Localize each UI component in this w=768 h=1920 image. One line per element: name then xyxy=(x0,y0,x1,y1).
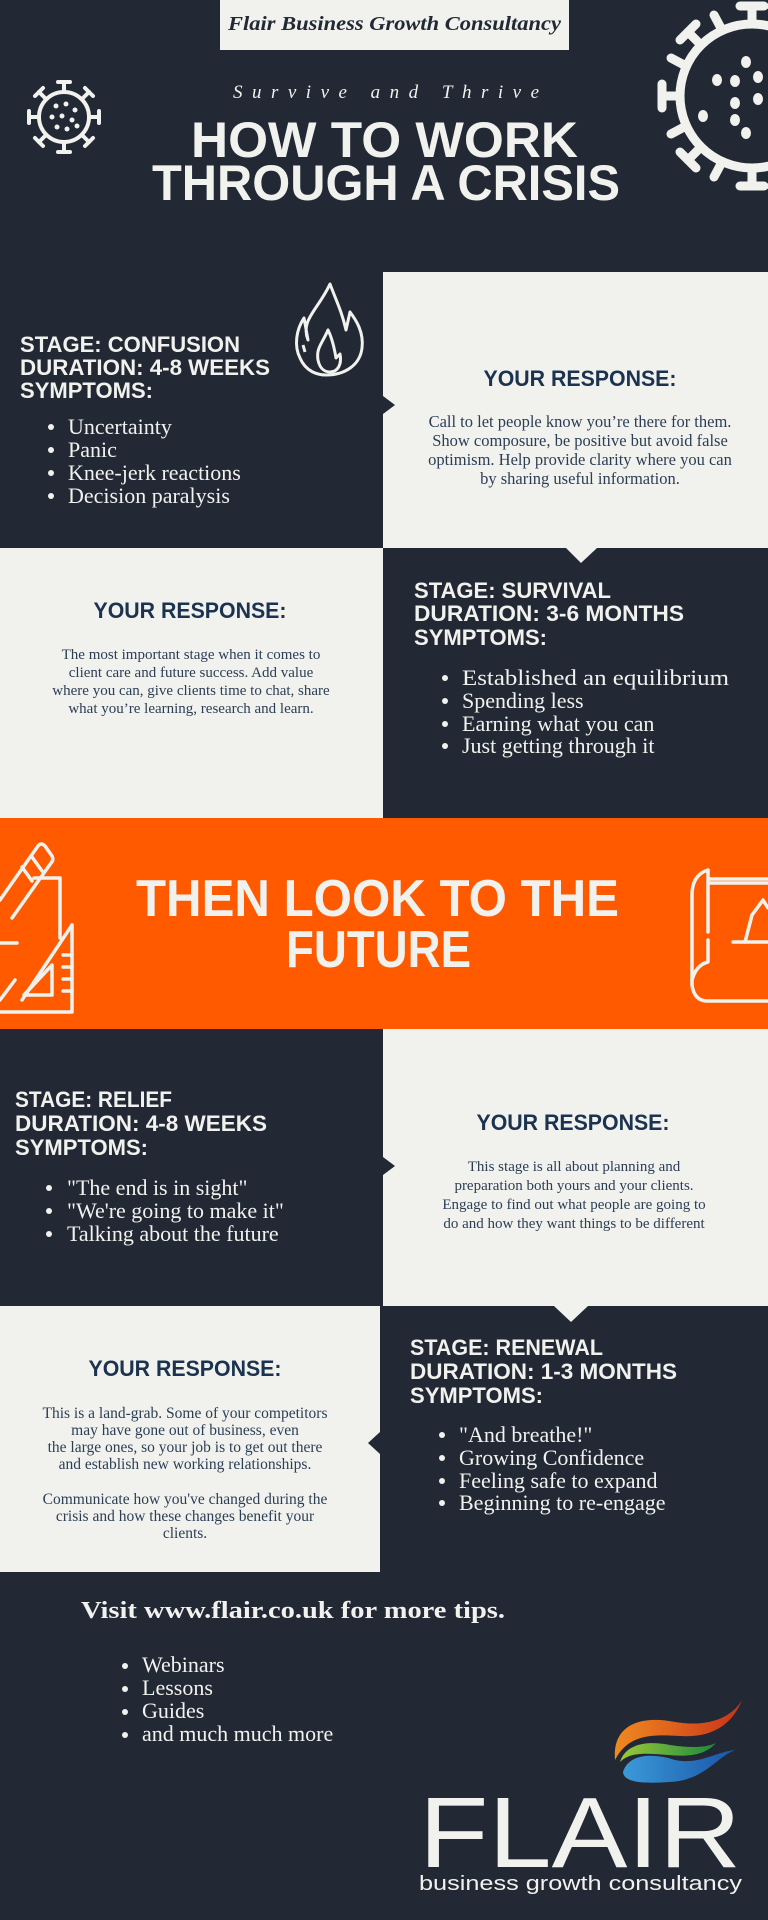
panel: response 4: clients. xyxy=(163,1525,207,1542)
panel: stage renewal: Growing Confidence xyxy=(459,1445,644,1470)
panel: response 2: The most important stage when it comes to xyxy=(62,647,320,663)
panel: stage relief xyxy=(15,1087,284,1246)
panel: response 3: This stage is all about planning and xyxy=(468,1159,681,1175)
icon: small virus xyxy=(29,82,99,152)
panel: response 4: crisis and how these changes benefit your xyxy=(56,1508,315,1525)
title: HOW TO WORK xyxy=(191,112,578,168)
panel: stage survival: Earning what you can xyxy=(462,711,654,736)
panel: response 4: This is a land-grab. Some of your competitors xyxy=(43,1405,327,1422)
panel: response 3: YOUR RESPONSE: xyxy=(476,1110,670,1135)
panel: stage confusion: Knee-jerk reactions xyxy=(68,460,241,485)
panel: response 1 xyxy=(383,272,768,563)
subtitle: Survive and Thrive xyxy=(233,82,539,103)
panel: stage confusion: STAGE: CONFUSION xyxy=(20,332,240,357)
footer text: Webinars xyxy=(142,1652,225,1677)
panel: response 3: Engage to find out what people are going to xyxy=(442,1197,706,1213)
panel: stage renewal: "And breathe!" xyxy=(459,1422,592,1447)
panel: stage relief: "The end is in sight" xyxy=(67,1175,248,1200)
header banner xyxy=(220,0,569,50)
panel: stage survival: STAGE: SURVIVAL xyxy=(414,578,611,603)
logo: flair xyxy=(419,1700,742,1895)
footer text: and much much more xyxy=(142,1721,333,1746)
panel: stage survival: SYMPTOMS: xyxy=(414,625,547,650)
panel: response 1: Show composure, be positive but avoid false xyxy=(432,431,728,450)
panel: stage confusion: Decision paralysis xyxy=(68,483,230,508)
panel: stage relief: SYMPTOMS: xyxy=(15,1135,148,1160)
panel: stage renewal: STAGE: RENEWAL xyxy=(410,1335,603,1360)
title xyxy=(152,112,620,211)
panel: response 4 xyxy=(0,1306,588,1572)
panel: response 4: and establish new working relationships. xyxy=(59,1456,311,1473)
panel: stage relief: DURATION: 4-8 WEEKS xyxy=(15,1111,267,1136)
panel: response 4: YOUR RESPONSE: xyxy=(88,1356,282,1381)
panel: stage survival: Just getting through it xyxy=(462,733,654,758)
panel: stage confusion: DURATION: 4-8 WEEKS xyxy=(20,355,270,380)
panel: stage survival: Spending less xyxy=(462,688,584,713)
panel: stage relief: STAGE: RELIEF xyxy=(15,1087,172,1112)
icon: fire xyxy=(297,284,362,375)
logo: flair: FLAIR xyxy=(419,1777,741,1889)
panel: stage renewal: Beginning to re-engage xyxy=(459,1490,666,1515)
panel: response 2 xyxy=(0,548,383,818)
panel: stage survival xyxy=(414,578,729,758)
panel: response 3: preparation both yours and your clients. xyxy=(454,1178,694,1194)
panel: response 1: YOUR RESPONSE: xyxy=(484,366,676,391)
icon: pencil and ruler xyxy=(0,844,72,1012)
panel: stage renewal xyxy=(410,1335,677,1515)
panel: stage relief: "We're going to make it" xyxy=(67,1198,284,1223)
panel: response 2: client care and future success. Add value xyxy=(69,665,314,681)
panel: response 1: optimism. Help provide clarity where you can xyxy=(428,450,732,469)
icon: large virus xyxy=(662,6,768,186)
panel: response 3: do and how they want things to be different xyxy=(443,1216,705,1232)
panel: response 3 xyxy=(383,1029,768,1306)
logo: flair: business growth consultancy xyxy=(419,1873,742,1895)
panel: stage renewal: SYMPTOMS: xyxy=(410,1383,543,1408)
panel: stage renewal: DURATION: 1-3 MONTHS xyxy=(410,1359,677,1384)
panel: then look to the future: FUTURE xyxy=(286,921,471,979)
panel: stage survival: DURATION: 3-6 MONTHS xyxy=(414,601,684,626)
panel: response 4: may have gone out of business, even xyxy=(71,1422,299,1439)
footer text: Guides xyxy=(142,1698,204,1723)
panel: response 1: Call to let people know you’re there for them. xyxy=(429,412,731,431)
footer text: Visit www.flair.co.uk for more tips. xyxy=(81,1598,505,1624)
panel: stage survival: Established an equilibrium xyxy=(462,665,729,690)
panel: stage confusion: Panic xyxy=(68,437,117,462)
panel: response 2: YOUR RESPONSE: xyxy=(94,598,286,623)
panel: response 4: the large ones, so your job is to get out there xyxy=(48,1439,323,1456)
panel: response 2: what you’re learning, research and learn. xyxy=(68,701,314,717)
panel: stage confusion: SYMPTOMS: xyxy=(20,378,153,403)
panel: stage relief: Talking about the future xyxy=(67,1221,279,1246)
icon: blueprint scroll xyxy=(692,870,768,1001)
footer text: Lessons xyxy=(142,1675,213,1700)
panel: stage confusion: Uncertainty xyxy=(68,414,172,439)
header banner: Flair Business Growth Consultancy xyxy=(227,13,561,35)
panel: then look to the future: THEN LOOK TO THE xyxy=(136,870,619,928)
footer text xyxy=(81,1598,505,1746)
panel: stage confusion xyxy=(20,332,270,508)
panel: response 4: Communicate how you've changed during the xyxy=(43,1491,327,1508)
panel: then look to the future xyxy=(0,818,768,1029)
panel: stage renewal: Feeling safe to expand xyxy=(459,1468,658,1493)
panel: response 1: by sharing useful information. xyxy=(480,469,680,488)
title: THROUGH A CRISIS xyxy=(152,155,620,211)
panel: response 2: where you can, give clients time to chat, share xyxy=(52,683,330,699)
